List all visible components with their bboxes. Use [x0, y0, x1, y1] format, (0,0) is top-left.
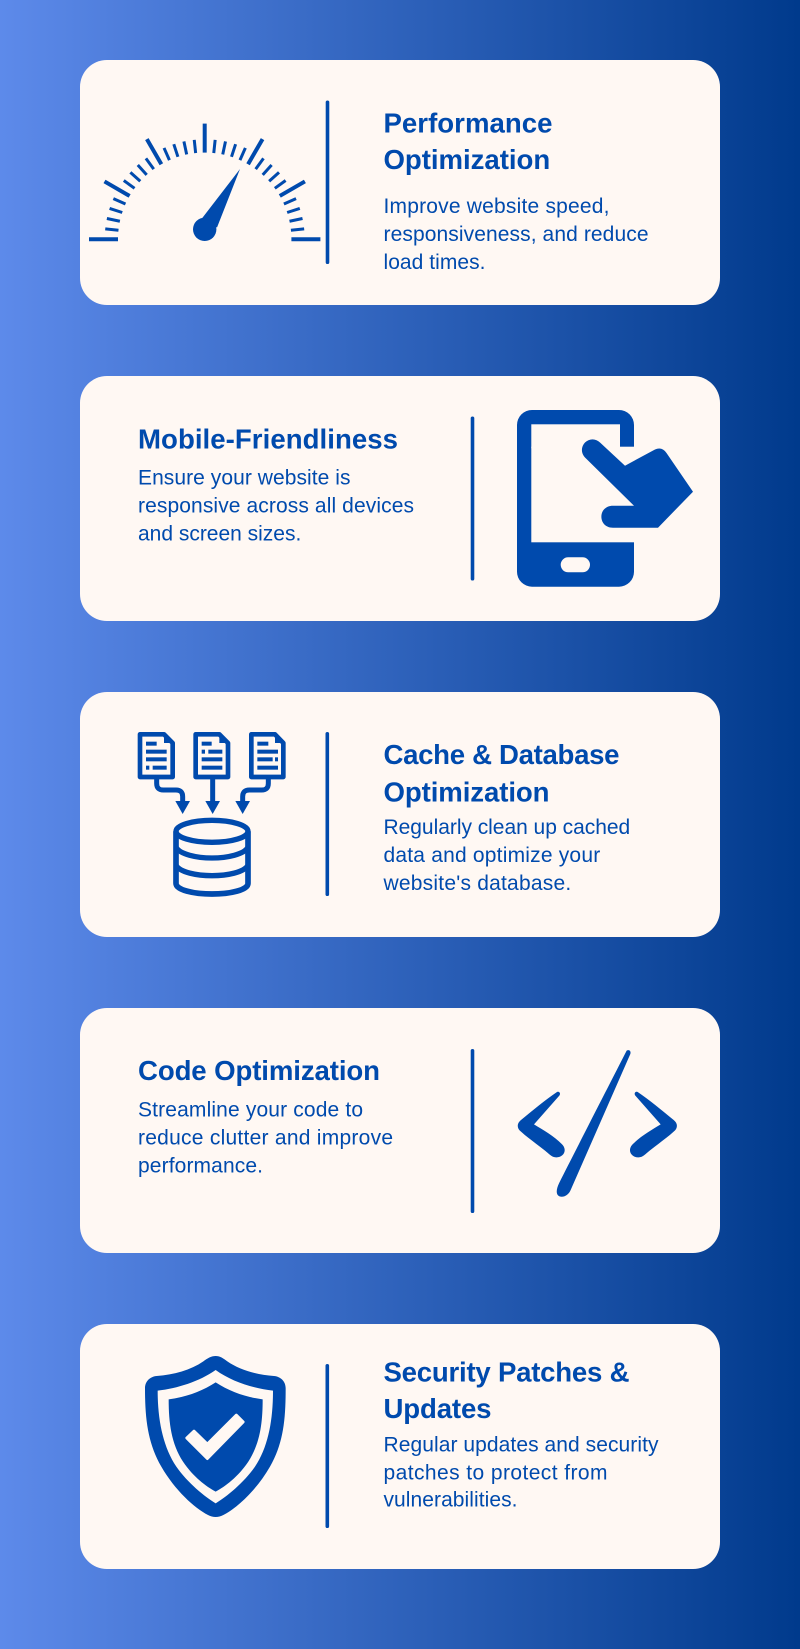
- heading: [384, 739, 620, 807]
- divider: [471, 416, 474, 580]
- panel: cache and database optimization: [80, 692, 720, 937]
- panel: mobile-friendliness: [80, 376, 720, 621]
- heading: [384, 107, 552, 175]
- body text: Improve website speed,: [384, 195, 610, 218]
- icon: phone with pointing hand: [517, 410, 693, 587]
- body text: [384, 195, 648, 274]
- body text: Regularly clean up cached: [384, 816, 630, 839]
- card background: [80, 60, 720, 305]
- icon: speedometer gauge: [89, 124, 320, 241]
- heading: Code Optimization: [138, 1055, 380, 1086]
- divider: [471, 1049, 474, 1213]
- body text: load times.: [384, 251, 486, 274]
- heading: Mobile-Friendliness: [138, 423, 398, 454]
- body text: patches to protect from: [384, 1461, 608, 1484]
- panel: code optimization: [80, 1008, 720, 1253]
- body text: Ensure your website is: [138, 466, 350, 489]
- body text: data and optimize your: [384, 844, 600, 867]
- icon: code brackets: [518, 1050, 677, 1197]
- body text: vulnerabilities.: [384, 1489, 518, 1512]
- body text: Streamline your code to: [138, 1098, 363, 1122]
- card background: [80, 1008, 720, 1253]
- body text: website's database.: [382, 872, 571, 895]
- body text: [138, 466, 414, 545]
- card background: [80, 376, 720, 621]
- heading: Cache & Database: [384, 739, 620, 770]
- card background: [80, 1324, 720, 1569]
- heading: [384, 1357, 630, 1424]
- heading: Performance: [384, 107, 552, 138]
- body text: [384, 1434, 659, 1512]
- heading: Updates: [384, 1393, 492, 1424]
- body text: reduce clutter and improve: [138, 1126, 393, 1150]
- body text: [138, 1098, 393, 1177]
- icon: documents flowing into database: [140, 734, 283, 894]
- panel: security patches and updates: [80, 1324, 720, 1569]
- divider: [326, 100, 329, 264]
- heading: Security Patches &: [384, 1357, 630, 1388]
- body text: performance.: [138, 1154, 263, 1177]
- heading: Optimization: [384, 144, 550, 175]
- body text: responsive across all devices: [138, 494, 414, 517]
- body text: [382, 816, 630, 895]
- divider: [326, 1364, 329, 1528]
- heading: Optimization: [384, 776, 550, 807]
- body text: Regular updates and security: [384, 1434, 659, 1457]
- card background: [80, 692, 720, 937]
- body text: and screen sizes.: [138, 522, 301, 545]
- body text: responsiveness, and reduce: [384, 223, 648, 246]
- icon: shield with check mark: [145, 1356, 286, 1517]
- divider: [326, 732, 329, 896]
- panel: performance optimization: [80, 60, 720, 305]
